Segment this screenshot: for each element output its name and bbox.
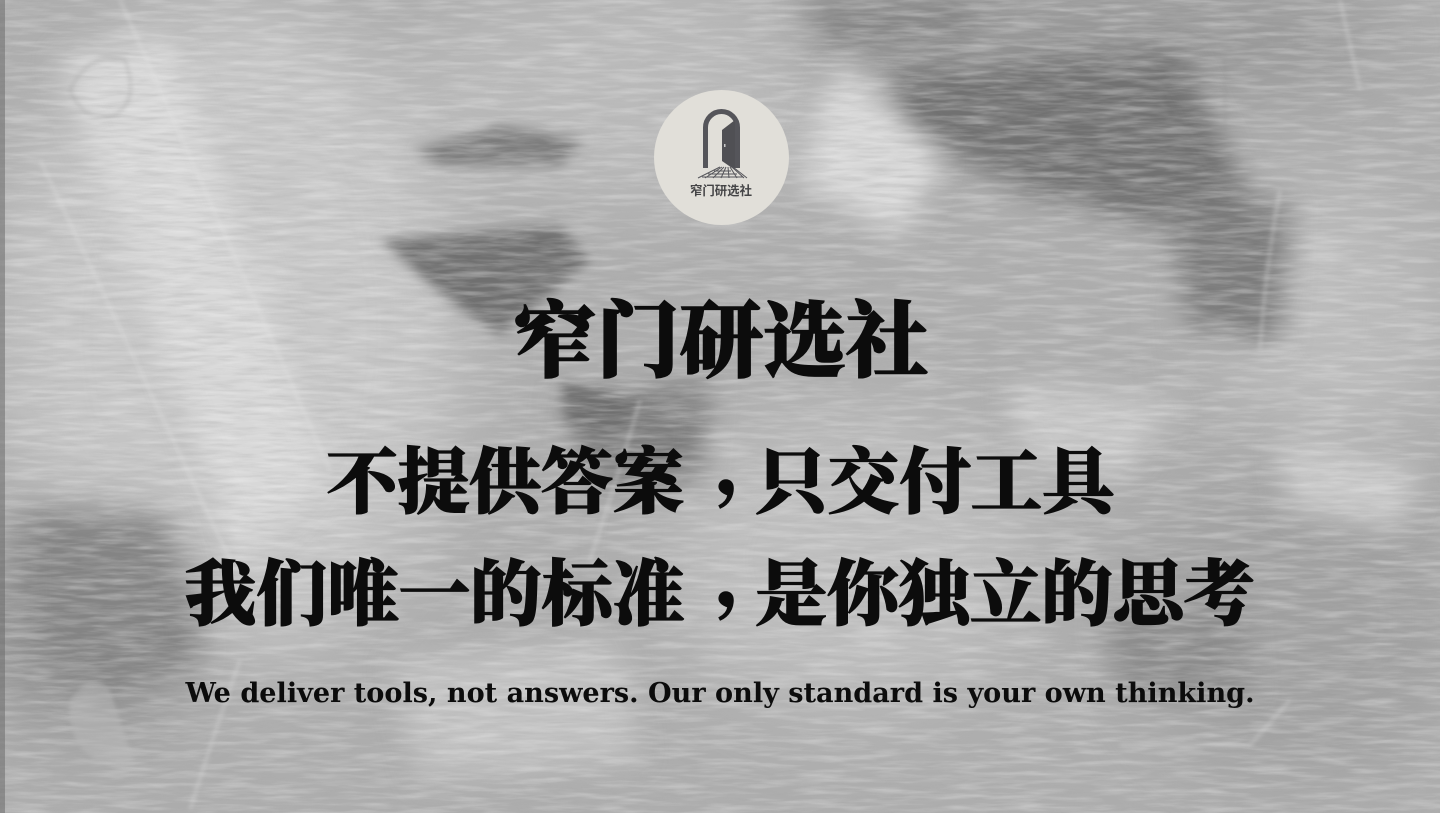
logo wordmark: 窄门研选社 <box>690 183 752 198</box>
icon: open door under arch <box>698 112 747 178</box>
logo badge: circle with doorway and brand name <box>654 90 789 225</box>
slogan line one: 不提供答案 ，只交付工具 <box>326 428 1114 523</box>
title: brand name: 窄门研选社 <box>514 296 928 388</box>
badge circle <box>654 90 789 225</box>
English tagline: We deliver tools, not answers. Our only standard is your own thinking. <box>185 678 1255 709</box>
slogan line two: 我们唯一的标准 ，是你独立的思考 <box>185 540 1255 635</box>
